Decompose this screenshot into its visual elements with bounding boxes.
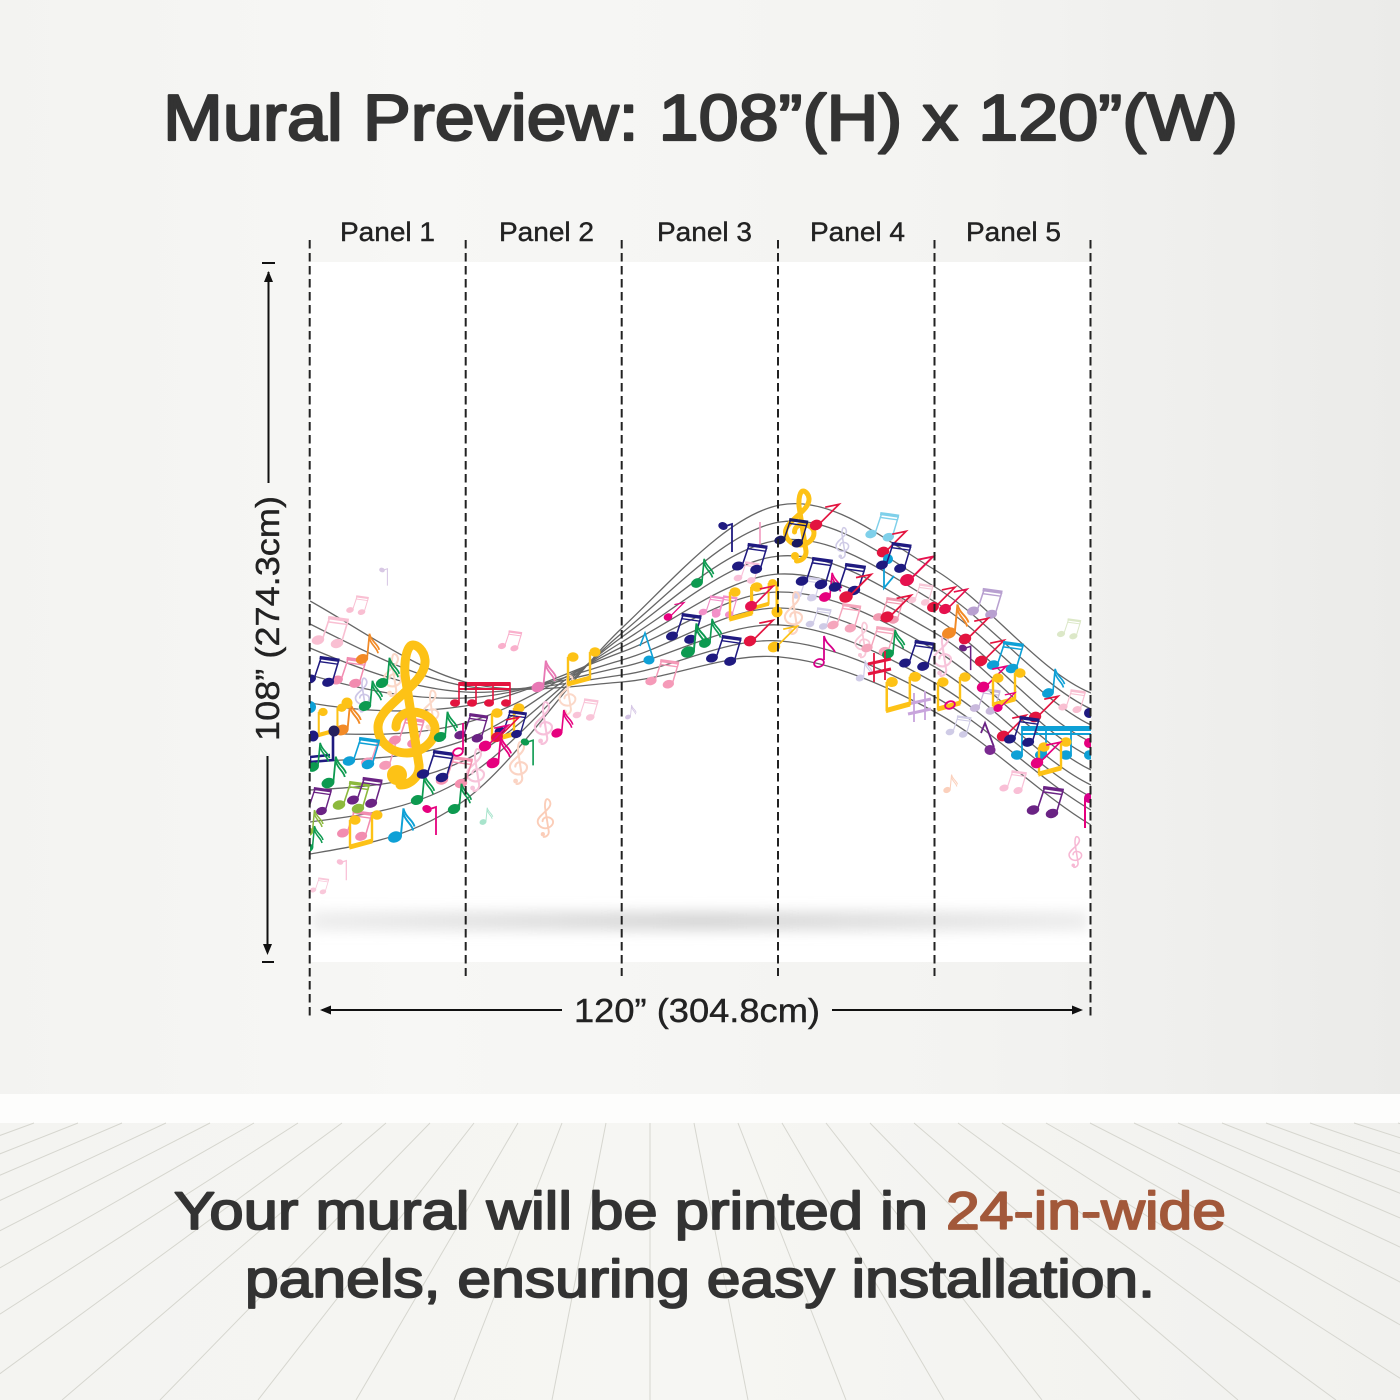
title: Mural Preview: 108”(H) x 120”(W) [163, 81, 1238, 154]
height label: 108” (274.3cm) [249, 496, 286, 741]
open magenta note with flag [813, 636, 835, 668]
width dimension arrow [320, 1006, 1083, 1014]
four-note crimson beam [450, 682, 511, 707]
panel labels: Panel 1 [340, 217, 435, 247]
bottom caption: Your mural will be printed in [174, 1182, 928, 1241]
wall background [0, 0, 1400, 1096]
music staff lines [310, 504, 1091, 854]
panel labels: Panel 5 [966, 217, 1061, 247]
panel labels [340, 217, 1061, 247]
coloured notes [299, 504, 1094, 854]
navy flipped note [310, 731, 333, 762]
baseboard [0, 1094, 1400, 1124]
bottom caption [174, 1182, 1226, 1309]
open magenta note [452, 723, 464, 757]
mural preview panel [299, 262, 1094, 962]
panel labels: Panel 2 [499, 217, 594, 247]
panel divider dashed lines [310, 240, 1090, 1016]
panel labels: Panel 4 [810, 217, 905, 247]
pale background notes [309, 512, 1086, 895]
wooden floor [0, 1123, 1400, 1400]
purple note [981, 723, 996, 755]
cyan note with back flag [640, 633, 654, 664]
floor shadow in mural [312, 911, 1088, 931]
width label: 120” (304.8cm) [574, 992, 820, 1029]
bottom caption: 24-in-wide [946, 1182, 1226, 1241]
bottom caption: panels, ensuring easy installation. [245, 1250, 1155, 1309]
cyan four-note beam [1011, 726, 1094, 760]
height dimension arrow [262, 263, 275, 962]
panel labels: Panel 3 [657, 217, 752, 247]
treble clef: left [378, 645, 435, 785]
treble clef: right [786, 491, 814, 561]
